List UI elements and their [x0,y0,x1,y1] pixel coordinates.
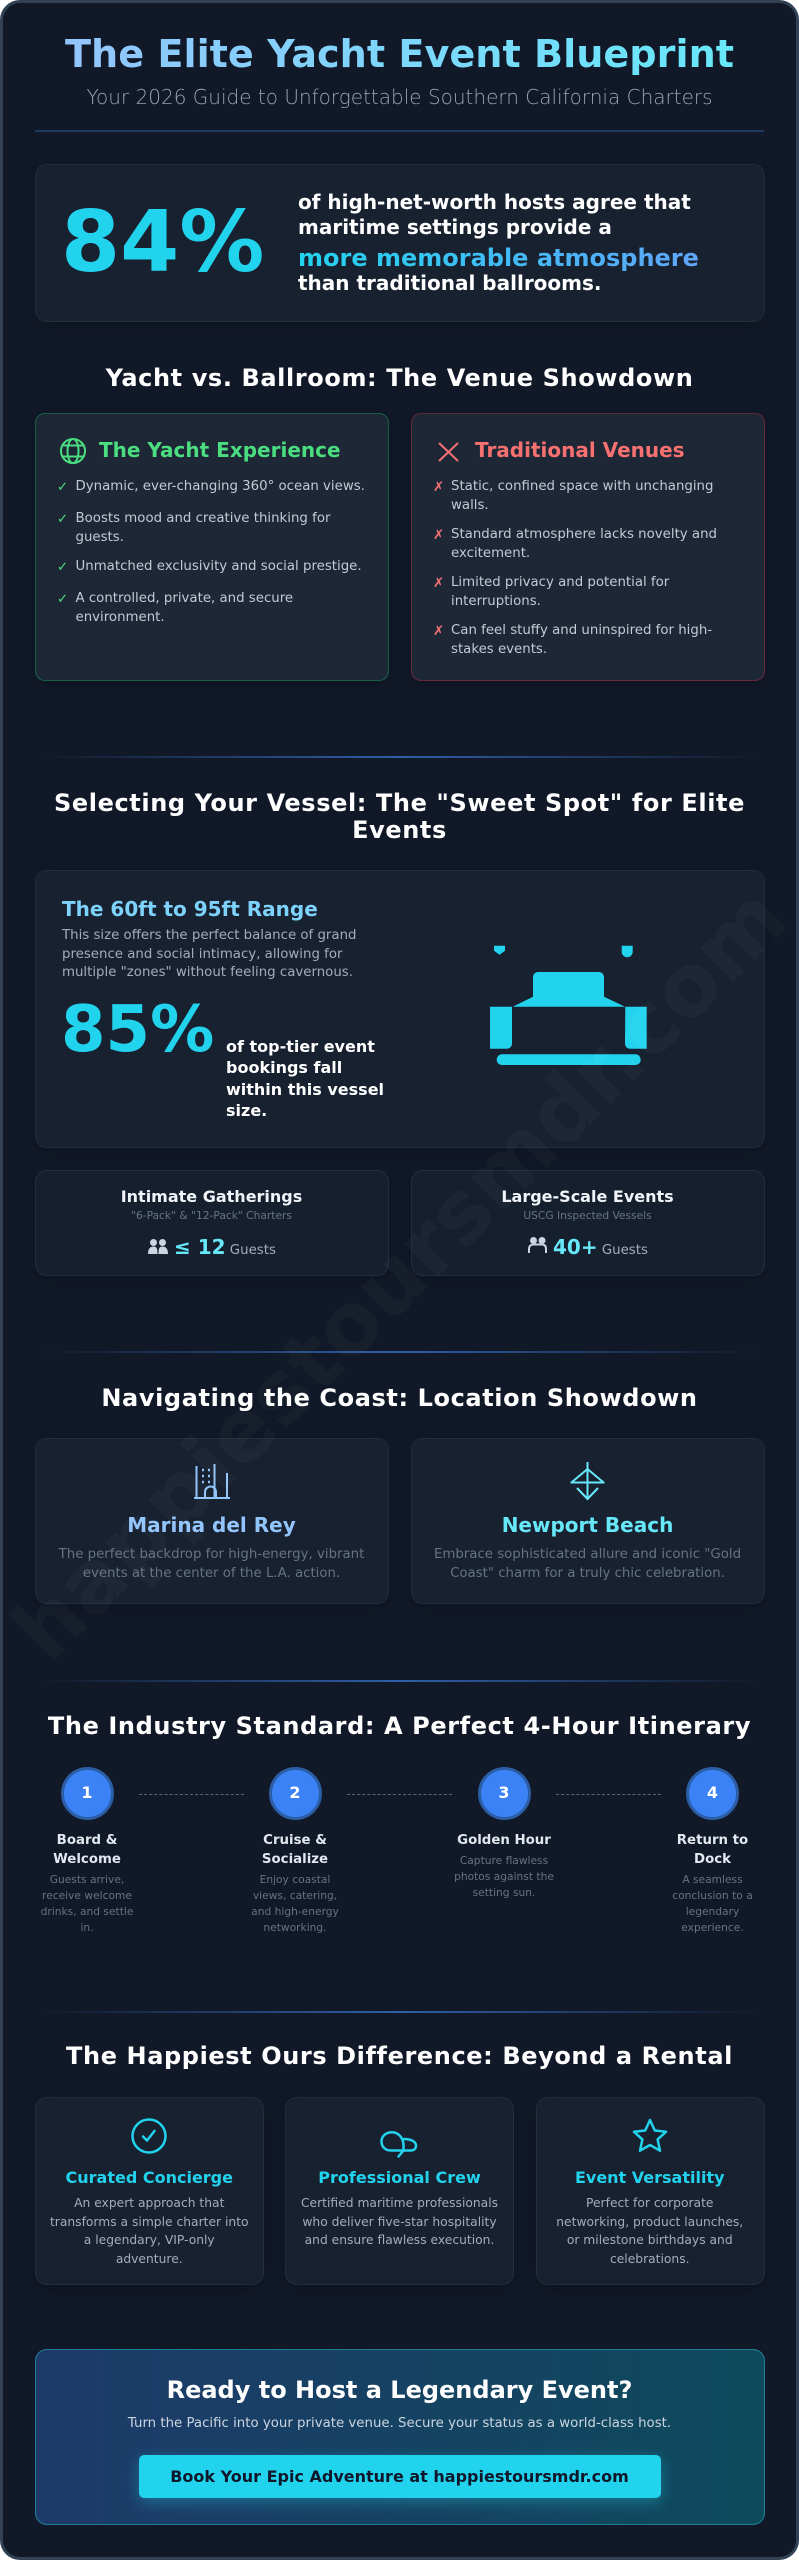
icon: check circle [131,2118,167,2154]
step 1 [41,1767,133,1934]
panel: traditional venues [411,413,764,681]
guest count: 40+ Guests [553,1235,648,1259]
icon: compass anchor [570,1462,604,1500]
concierge description: a legendary, VIP-only [84,2233,215,2247]
yacht benefits list: ✓ [57,480,68,495]
panel: professional crew [285,2097,514,2285]
step 3: setting sun. [473,1886,535,1898]
traditional drawbacks list: Standard atmosphere lacks novelty and [451,527,717,542]
yacht benefits list: Unmatched exclusivity and social prestige. [76,559,362,574]
heading: difference: The Happiest Ours Difference: Beyond a Rental [66,2042,733,2070]
panel: newport beach [411,1438,764,1604]
versatility description: celebrations. [610,2252,690,2266]
statistic text: than traditional ballrooms. [298,271,602,295]
versatility description: or milestone birthdays and [567,2233,733,2247]
step 4: Return to [677,1833,748,1848]
step 2: 2 [289,1783,301,1802]
heading: navigating the coast: Navigating the Coast: Location Showdown [101,1384,698,1412]
panel: intimate gatherings [35,1170,388,1276]
booking text: within this vessel [226,1080,384,1099]
statistic text: more memorable atmosphere [298,244,699,272]
step 4: Dock [694,1852,731,1867]
traditional drawbacks list: ✗ [433,480,444,495]
step 4: 4 [707,1783,718,1802]
heading: selecting your vessel: Events [352,816,447,844]
step 2: Socialize [262,1852,328,1867]
step 1: Welcome [53,1852,121,1867]
versatility description: Perfect for corporate [586,2196,713,2210]
versatility title: Event Versatility [575,2168,725,2187]
traditional drawbacks list: ✗ [433,576,444,591]
statistic text [298,190,699,295]
traditional drawbacks list: stakes events. [451,642,547,657]
icon: cross [438,442,459,462]
heading: selecting your vessel: Selecting Your Vessel: The "Sweet Spot" for Elite [54,789,745,817]
newport description: Coast" charm for a truly chic celebration. [450,1566,725,1581]
traditional drawbacks list: Can feel stuffy and uninspired for high- [451,623,712,638]
concierge description: transforms a simple charter into [50,2215,249,2229]
step 4: experience. [681,1920,744,1934]
step 1: 1 [81,1783,93,1802]
icon: crew [380,2131,418,2158]
marina description: The perfect backdrop for high-energy, vibrant [59,1547,364,1562]
traditional drawbacks list [433,479,717,657]
guest count: ≤ 12 Guests [174,1235,276,1259]
marina description: events at the center of the L.A. action. [83,1566,340,1581]
yacht benefits list [57,479,365,625]
range description: This size offers the perfect balance of grand [62,928,356,943]
booking text [226,1037,384,1120]
booking text: size. [226,1101,267,1120]
step 1: drinks, and settle [41,1904,133,1918]
booking text: of top-tier event [226,1037,375,1056]
step 1: receive welcome [42,1888,132,1902]
step 3 [454,1767,554,1898]
statistic text: maritime settings provide a [298,215,612,239]
step 3: Golden Hour [457,1833,551,1848]
icon: globe [60,438,86,464]
yacht benefits list: Boosts mood and creative thinking for [76,511,330,526]
panel: yacht experience [35,413,388,681]
step 4: conclusion to a [672,1888,753,1902]
yacht benefits list: ✓ [57,592,68,607]
step 1: Guests arrive, [50,1872,124,1886]
subtitle: Your 2026 Guide to Unforgettable Southern California Charters [86,85,713,109]
panel: large-scale events [411,1170,764,1276]
icon: buildings [194,1464,230,1499]
heading: selecting your vessel [54,789,745,844]
step 3: photos against the [454,1870,554,1882]
traditional drawbacks list: walls. [451,498,489,513]
panel: sweet spot [35,870,764,1148]
big stat 84%: 84% [61,193,264,292]
icon: star [632,2118,668,2152]
traditional drawbacks list: Limited privacy and potential for [451,575,669,590]
range description: presence and social intimacy, allowing for [62,947,342,962]
step 2 [251,1767,339,1934]
crew description: Certified maritime professionals [301,2196,498,2210]
traditional drawbacks list: interruptions. [451,594,541,609]
versatility description: networking, product launches, [556,2215,743,2229]
newport description: Embrace sophisticated allure and iconic "Gold [434,1547,741,1562]
icon: guests [528,1237,547,1253]
header [35,33,764,132]
step 2: views, catering, [253,1888,337,1902]
panel: event versatility [536,2097,764,2285]
crew title: Professional Crew [318,2168,481,2187]
heading: itinerary: The Industry Standard: A Perfect 4-Hour Itinerary [48,1712,751,1740]
icon: yacht [490,946,647,1065]
concierge description: An expert approach that [74,2196,224,2210]
title: The Elite Yacht Event Blueprint [65,33,734,77]
versatility description [556,2196,743,2266]
concierge title: Curated Concierge [66,2168,233,2187]
card title: Intimate Gatherings [121,1187,302,1206]
concierge description [50,2196,249,2266]
heading: venue showdown: Yacht vs. Ballroom: The Venue Showdown [106,364,693,392]
newport description [434,1547,741,1581]
cta heading: Ready to Host a Legendary Event? [167,2376,632,2404]
step 2: and high-energy [251,1904,339,1918]
card subtitle: USCG Inspected Vessels [523,1209,652,1222]
crew description: who deliver five-star hospitality [302,2215,497,2229]
range heading: The 60ft to 95ft Range [62,897,318,921]
card title: Large-Scale Events [501,1187,674,1206]
traditional drawbacks list: ✗ [433,528,444,543]
traditional drawbacks list: excitement. [451,546,530,561]
yacht heading: The Yacht Experience [99,438,341,462]
statistic text: of high-net-worth hosts agree that [298,190,691,214]
card subtitle: "6-Pack" & "12-Pack" Charters [131,1209,292,1222]
step 4 [672,1767,753,1934]
step 2: Enjoy coastal [260,1872,330,1886]
panel: call to action [35,2349,764,2525]
yacht benefits list: Dynamic, ever-changing 360° ocean views. [76,479,365,494]
range description: multiple "zones" without feeling cavernous. [62,965,353,980]
cta button [138,2454,660,2498]
yacht benefits list: A controlled, private, and secure [76,591,293,606]
panel: 84% statistic [35,164,764,322]
icon: guests [148,1239,168,1254]
watermark: happiestoursmdr.com [0,868,799,1681]
big stat 85%: 85% [61,993,214,1067]
marina description [58,1547,364,1581]
yacht benefits list: guests. [76,530,124,545]
marina title: Marina del Rey [127,1513,296,1537]
booking text: bookings fall [226,1058,342,1077]
cta text: Turn the Pacific into your private venue. Secure your status as a world-class host. [128,2416,671,2431]
panel: marina del rey [35,1438,388,1604]
traditional drawbacks list: ✗ [433,624,444,639]
step 3: 3 [498,1783,510,1802]
crew description [301,2196,498,2247]
traditional drawbacks list: Static, confined space with unchanging [451,479,713,494]
step 3: Capture flawless [460,1854,548,1866]
yacht benefits list: environment. [76,610,165,625]
yacht benefits list: ✓ [57,560,68,575]
range description [62,928,356,980]
crew description: and ensure flawless execution. [305,2233,494,2247]
step 4: A seamless [682,1872,743,1886]
yacht benefits list: ✓ [57,512,68,527]
step 1: in. [80,1920,94,1934]
itinerary timeline [41,1767,753,1934]
step 4: legendary [686,1904,739,1918]
step 2: Cruise & [263,1833,327,1848]
concierge description: adventure. [116,2252,183,2266]
cta button: Book Your Epic Adventure at happiestoursmdr.com [170,2466,629,2486]
newport title: Newport Beach [502,1513,673,1537]
step 1: Board & [57,1833,117,1848]
traditional heading: Traditional Venues [475,438,685,462]
panel: curated concierge [35,2097,264,2285]
step 2: networking. [263,1920,327,1934]
